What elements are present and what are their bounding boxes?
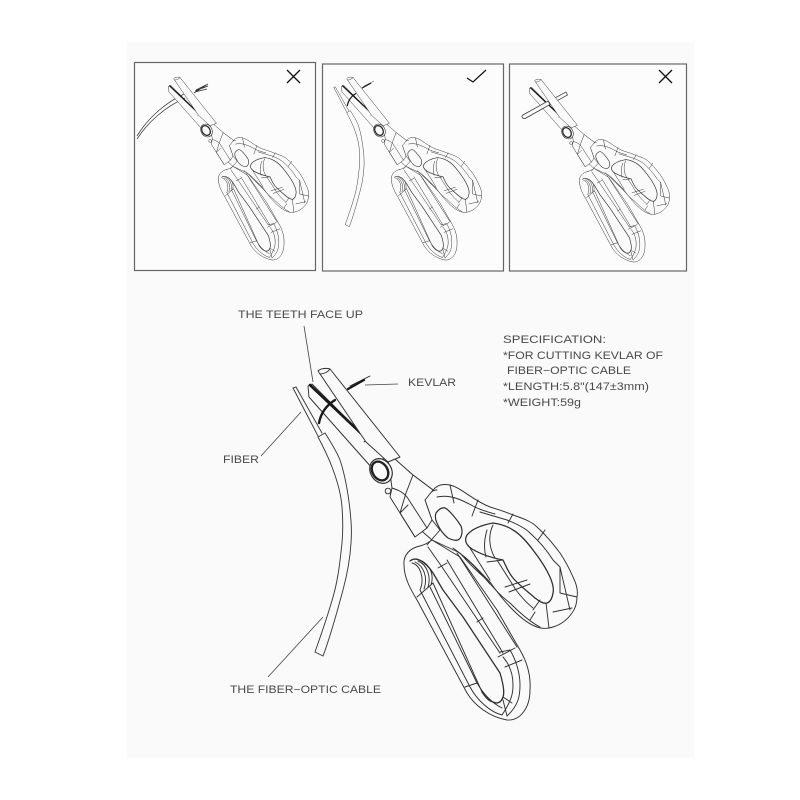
cross mark — [659, 70, 672, 83]
specification text: *LENGTH:5.8"(147±3mm) — [503, 381, 649, 393]
main scissors — [308, 368, 577, 720]
check mark — [467, 70, 486, 82]
fiber-optic cable — [293, 387, 351, 656]
label: teeth: THE TEETH FACE UP — [238, 309, 363, 321]
cable stub behind blades — [523, 92, 568, 118]
specification text — [503, 334, 663, 409]
panel: correct, cutting only kevlar — [322, 64, 504, 271]
panel: wrong, cutting cable stub — [510, 64, 686, 271]
cable and fiber — [334, 87, 364, 227]
scissors — [342, 77, 482, 260]
specification text: *FOR CUTTING KEVLAR OF — [503, 350, 663, 362]
specification text: SPECIFICATION: — [503, 334, 606, 346]
scissors — [169, 77, 309, 260]
kevlar wisp — [194, 84, 208, 93]
page sheet — [127, 42, 694, 758]
label: fiber: FIBER — [223, 454, 259, 466]
kevlar strands — [319, 376, 370, 423]
main diagram — [223, 309, 577, 720]
specification text: FIBER−OPTIC CABLE — [507, 365, 631, 377]
cross mark — [287, 70, 300, 83]
cable crossing blades — [137, 94, 185, 139]
label: kevlar: KEVLAR — [408, 377, 456, 389]
kevlar — [347, 81, 374, 106]
specification text: *WEIGHT:59g — [503, 397, 581, 409]
label: cable: THE FIBER−OPTIC CABLE — [230, 684, 381, 696]
cable stub in front of lower blade — [522, 101, 550, 119]
leader lines — [261, 326, 398, 677]
panel: wrong, cutting the whole cable — [134, 62, 316, 270]
scissors — [530, 79, 670, 262]
